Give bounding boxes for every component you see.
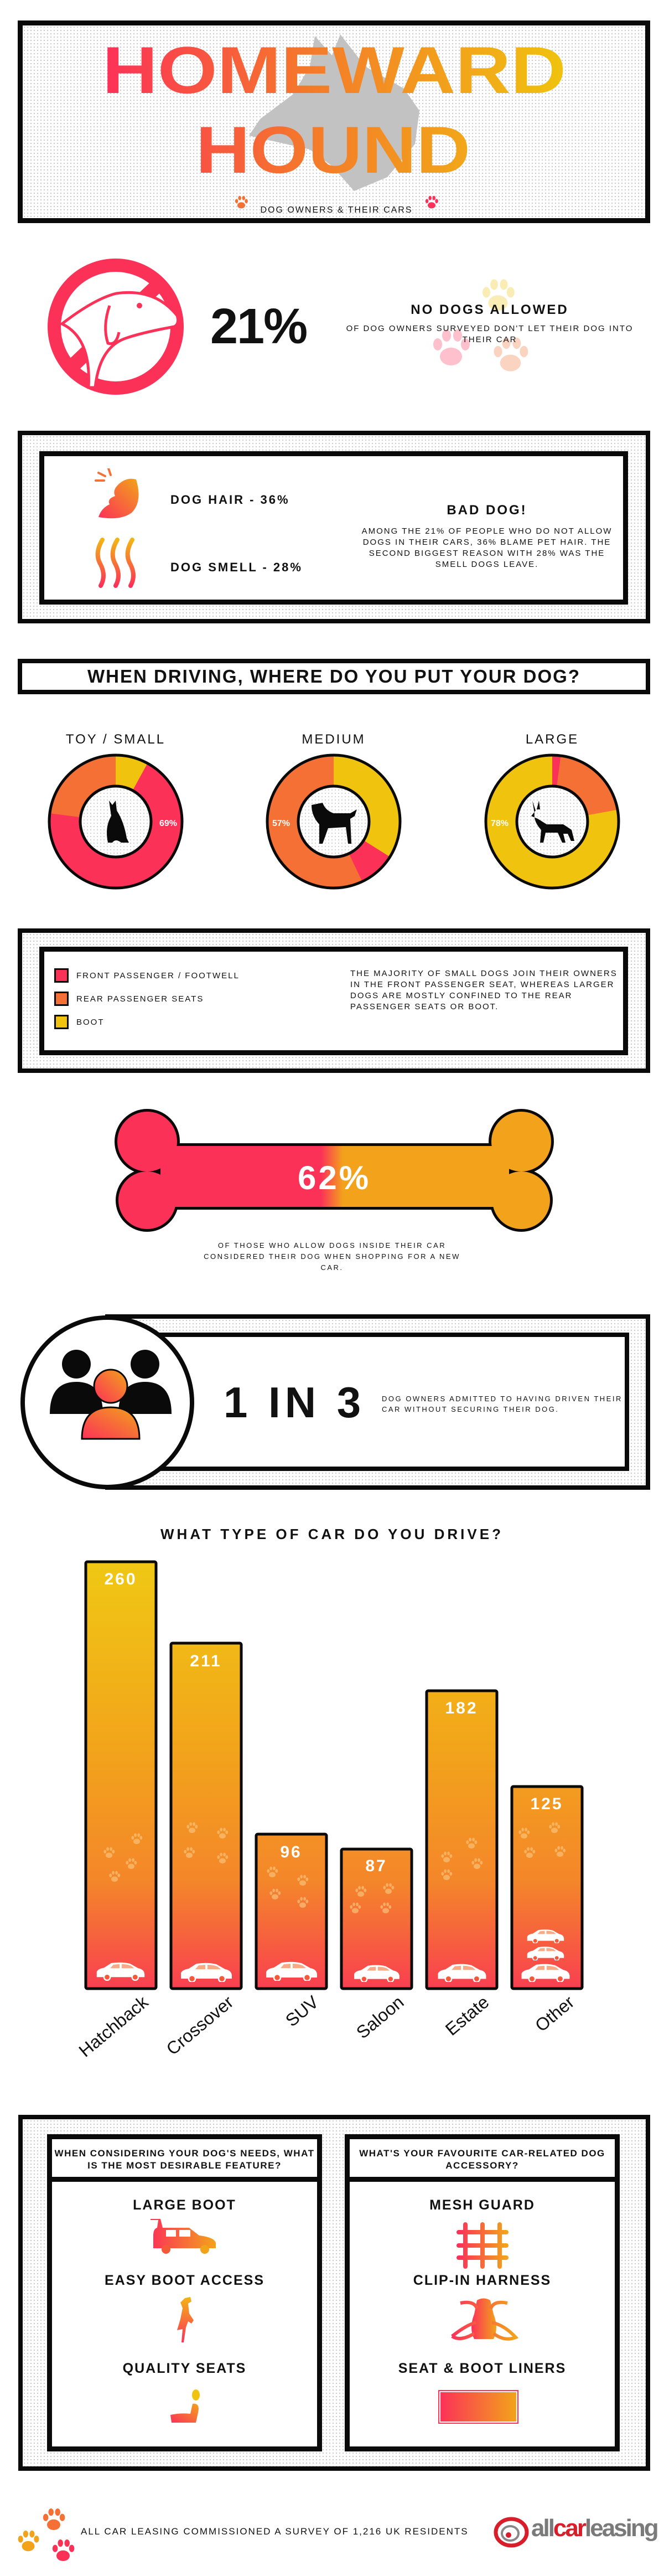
donut: medium [267, 755, 400, 888]
text: dog hair: DOG HAIR - 36% [170, 493, 290, 507]
subtitle [235, 196, 438, 215]
donut: large [486, 755, 619, 888]
item: large boot: LARGE BOOT [133, 2197, 236, 2213]
bone: 62%: 62% [298, 1159, 371, 1196]
label: medium: MEDIUM [302, 732, 366, 747]
bar chart: car types [75, 1560, 583, 2061]
legend items: BOOT [76, 1018, 105, 1026]
bar chart: car types: Crossover [163, 1992, 237, 2059]
icon: smell [95, 538, 136, 588]
donut charts [48, 732, 620, 889]
title [102, 33, 566, 187]
icon: mesh [456, 2222, 509, 2269]
logo [494, 2515, 657, 2548]
heading: where do you put your dog [18, 659, 650, 694]
panel: 1 in 3 [105, 1314, 650, 1490]
icon: liner [438, 2390, 518, 2424]
bar chart: car types: 182 [445, 1699, 478, 1717]
title: HOUND [196, 113, 470, 187]
item: mesh guard: MESH GUARD [429, 2197, 535, 2213]
donut: large: 78% [491, 819, 509, 828]
panel: desirable feature [47, 2134, 322, 2451]
bar chart: car types: Other [531, 1992, 578, 2036]
item: quality seats: QUALITY SEATS [123, 2361, 246, 2376]
bar chart: car types: SUV [282, 1991, 323, 2031]
legend items [54, 968, 240, 1029]
text: dog smell: DOG SMELL - 28% [170, 560, 303, 574]
footer text: ALL CAR LEASING COMMISSIONED A SURVEY OF 1,216 UK RESIDENTS [81, 2526, 469, 2537]
heading: desirable feature [52, 2139, 317, 2182]
title: HOMEWARD [102, 33, 566, 107]
heading: where do you put your dog: WHEN DRIVING, WHERE DO YOU PUT YOUR DOG? [87, 666, 580, 686]
text: bad dog [362, 503, 612, 569]
heading: desirable feature: WHEN CONSIDERING YOUR DOG'S NEEDS, WHAT IS THE MOST DESIRABLE FEATURE? [55, 2148, 314, 2171]
legend items: REAR PASSENGER SEATS [76, 994, 204, 1003]
text: no dogs allowed: OF DOG OWNERS SURVEYED DON'T LET THEIR DOG INTO THEIR CAR [346, 324, 633, 344]
text: 1 in 3 caption: DOG OWNERS ADMITTED TO HAVING DRIVEN THEIR CAR WITHOUT SECURING THEIR DOG. [382, 1395, 622, 1413]
header artwork [102, 33, 566, 215]
icon: harness [451, 2299, 518, 2341]
icon: hair [95, 468, 138, 518]
icon: jumping dog [177, 2297, 194, 2342]
bar chart: car types: 96 [280, 1843, 302, 1861]
text: bone caption: OF THOSE WHO ALLOW DOGS INSIDE THEIR CAR CONSIDERED THEIR DOG WHEN SHOPPING FOR A NEW CAR. [204, 1241, 460, 1272]
icon: car with open boot [151, 2219, 216, 2254]
donut: medium: 57% [272, 819, 290, 828]
bone: 62% [115, 1109, 554, 1232]
bar chart: car types: Saloon [352, 1992, 407, 2042]
label: toy: TOY / SMALL [66, 732, 165, 747]
text: no dogs allowed [346, 302, 633, 344]
label: large: LARGE [526, 732, 579, 747]
subtitle: DOG OWNERS & THEIR CARS [260, 205, 413, 215]
donut: toy/small [49, 755, 182, 888]
bar chart: car types: 260 [104, 1570, 137, 1588]
item: clip-in harness: CLIP-IN HARNESS [413, 2273, 551, 2288]
item: easy boot access: EASY BOOT ACCESS [105, 2273, 264, 2288]
header panel [18, 20, 650, 223]
text: bad dog: AMONG THE 21% OF PEOPLE WHO DO NOT ALLOW DOGS IN THEIR CARS, 36% BLAME PET HAIR. THE SECOND BIGGEST REASON WITH 28% WAS THE SMELL DOGS LEAVE. [362, 526, 612, 569]
dog silhouette [249, 34, 419, 191]
icon: people circle [20, 1315, 194, 1489]
heading: favourite accessory: WHAT'S YOUR FAVOURITE CAR-RELATED DOG ACCESSORY? [359, 2148, 605, 2171]
logo: allcarleasing [531, 2515, 657, 2542]
footer paws [18, 2508, 74, 2561]
panel: favourite accessory [345, 2134, 620, 2451]
icon: no dogs [48, 259, 184, 395]
panel: legend [18, 928, 650, 1073]
panel: features and accessories [18, 2115, 650, 2471]
text: bad dog: BAD DOG! [447, 503, 527, 518]
item: seat & boot liners: SEAT & BOOT LINERS [398, 2361, 566, 2376]
decorative paws [433, 279, 528, 371]
bar chart: car types: Hatchback [75, 1991, 152, 2061]
heading: favourite accessory [350, 2139, 615, 2182]
bar chart: car types: 211 [190, 1652, 222, 1670]
stat: 1 in 3: 1 IN 3 [224, 1378, 365, 1427]
legend items: FRONT PASSENGER / FOOTWELL [76, 971, 240, 980]
icon: seat [170, 2389, 200, 2423]
bar chart: car types: 125 [530, 1795, 563, 1813]
panel: bad dog [18, 431, 650, 623]
heading: car type: WHAT TYPE OF CAR DO YOU DRIVE? [160, 1526, 504, 1542]
text: no dogs allowed: NO DOGS ALLOWED [411, 302, 569, 317]
donut: toy/small: 69% [159, 819, 177, 828]
bar chart: car types: Estate [442, 1992, 492, 2040]
stat: 21%: 21% [210, 299, 307, 354]
bar chart: car types: 87 [365, 1857, 387, 1875]
text: legend explanation: THE MAJORITY OF SMALL DOGS JOIN THEIR OWNERS IN THE FRONT PASSENGER SEAT, WHEREAS LARGER DOGS ARE MOSTLY CONFINED TO THE REAR PASSENGER SEATS OR BOOT. [350, 969, 618, 1011]
